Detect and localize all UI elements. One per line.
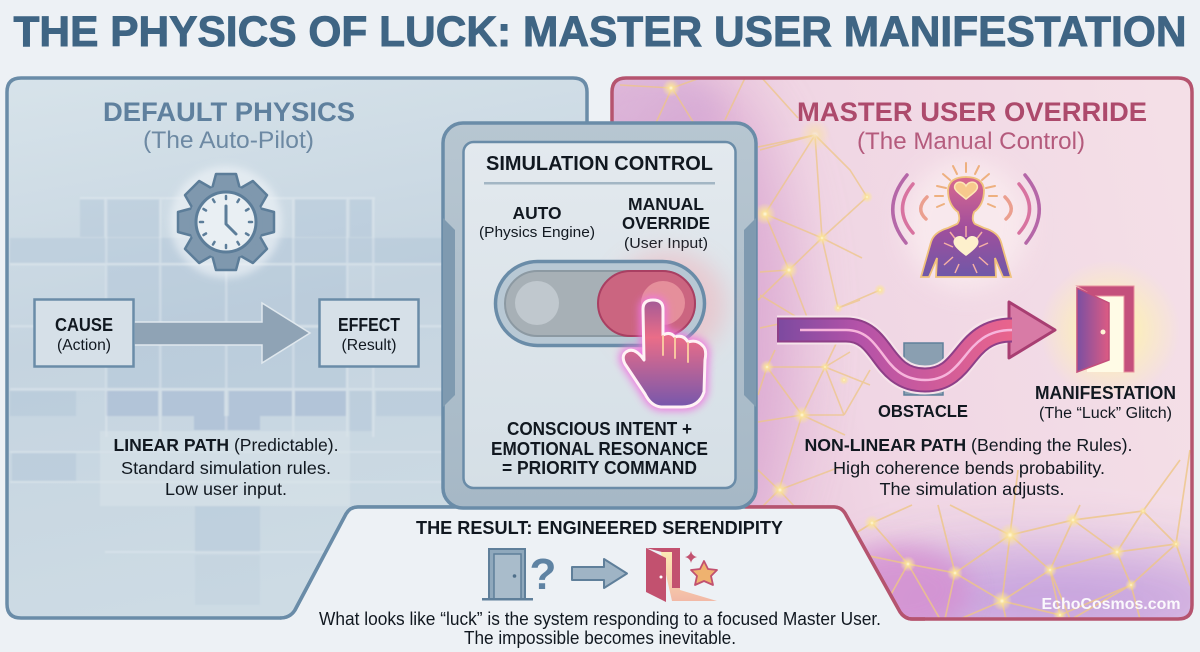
icon: gear with clock bbox=[170, 166, 282, 278]
heading: default physics bbox=[103, 97, 355, 154]
label: manual override: OVERRIDE bbox=[622, 213, 710, 233]
text: linear path: Low user input. bbox=[165, 479, 287, 499]
text: result description: The impossible becomes inevitable. bbox=[464, 628, 736, 648]
text: priority command: = PRIORITY COMMAND bbox=[502, 458, 697, 478]
box: cause: CAUSE bbox=[55, 315, 113, 335]
icon: closed door with question mark bbox=[482, 549, 556, 600]
arrow: question to open door bbox=[572, 559, 627, 588]
text: non-linear path: NON-LINEAR PATH (Bending the Rules). bbox=[804, 435, 1132, 455]
icon: open door with star bbox=[646, 548, 717, 602]
label: auto: AUTO bbox=[512, 203, 562, 223]
obstacle block bbox=[904, 343, 943, 395]
toggle switch bbox=[496, 251, 726, 359]
text: result description bbox=[319, 609, 881, 648]
label: obstacle: OBSTACLE bbox=[878, 401, 968, 421]
title: THE PHYSICS OF LUCK: MASTER USER MANIFESTATION bbox=[14, 8, 1186, 56]
text: priority command: EMOTIONAL RESONANCE bbox=[491, 439, 708, 459]
label: auto bbox=[479, 203, 595, 241]
label: manual override: (User Input) bbox=[624, 235, 708, 252]
divider line bbox=[484, 182, 715, 184]
text: result description: What looks like “luck” is the system responding to a focused Master User. bbox=[319, 609, 881, 629]
heading: master user override: (The Manual Control) bbox=[857, 128, 1085, 155]
label: manual override: MANUAL bbox=[628, 194, 704, 214]
label: manifestation: (The “Luck” Glitch) bbox=[1039, 405, 1172, 422]
panel: result bbox=[280, 507, 925, 652]
heading: default physics: (The Auto-Pilot) bbox=[143, 127, 314, 154]
heading: simulation control: SIMULATION CONTROL bbox=[486, 153, 713, 175]
label: manifestation bbox=[1035, 383, 1176, 422]
background grid tiles bbox=[10, 198, 441, 552]
box: cause: (Action) bbox=[57, 337, 111, 354]
box: effect: (Result) bbox=[342, 337, 396, 354]
arrow: cause to effect bbox=[134, 303, 310, 363]
label: auto: (Physics Engine) bbox=[479, 224, 595, 241]
box: effect bbox=[320, 300, 418, 366]
heading: master user override: MASTER USER OVERRIDE bbox=[797, 97, 1147, 127]
panel: simulation control device bbox=[443, 123, 756, 508]
icon: glowing open door bbox=[1040, 260, 1180, 400]
text: non-linear path: High coherence bends probability. bbox=[833, 458, 1105, 478]
text: non-linear path: The simulation adjusts. bbox=[880, 479, 1064, 499]
label: manual override bbox=[622, 194, 710, 252]
text: linear path: Standard simulation rules. bbox=[121, 458, 331, 478]
icon: pointing hand bbox=[623, 300, 706, 407]
panel: default physics bbox=[7, 78, 587, 618]
text: linear path: LINEAR PATH (Predictable). bbox=[114, 435, 338, 455]
heading: the result: THE RESULT: ENGINEERED SERENDIPITY bbox=[416, 517, 784, 538]
purple haze and constellation bbox=[580, 70, 1200, 650]
text: priority command: CONSCIOUS INTENT + bbox=[507, 419, 692, 439]
text: non-linear path bbox=[804, 435, 1132, 499]
box: cause bbox=[34, 300, 134, 366]
label: manifestation: MANIFESTATION bbox=[1035, 383, 1176, 403]
box: effect: EFFECT bbox=[338, 315, 400, 335]
text: priority command bbox=[491, 419, 708, 478]
arrow: bending path bbox=[777, 302, 1055, 380]
heading: master user override bbox=[797, 97, 1147, 155]
icon: radiating person with heart bbox=[893, 160, 1039, 290]
icon: closed door with question mark: ? bbox=[530, 550, 556, 599]
panel: master user override bbox=[610, 76, 1194, 621]
watermark: EchoCosmos.com bbox=[1042, 596, 1180, 613]
heading: default physics: DEFAULT PHYSICS bbox=[103, 97, 355, 127]
text: linear path bbox=[114, 435, 338, 499]
